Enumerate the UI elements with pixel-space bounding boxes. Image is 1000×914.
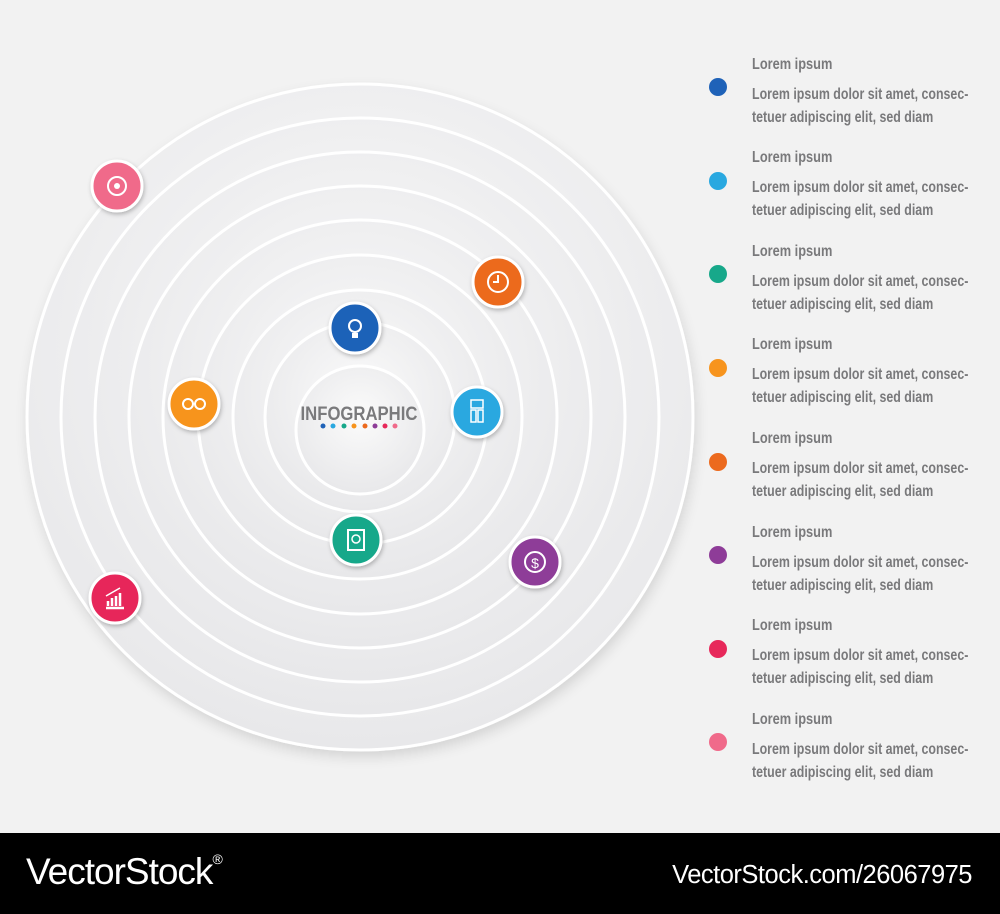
text: Lorem ipsum dolor sit amet, consec- xyxy=(752,86,968,103)
text: Lorem ipsum xyxy=(752,56,832,73)
icon: target (pink) xyxy=(92,161,142,211)
icon: dollar (purple) xyxy=(510,537,560,587)
text: Lorem ipsum dolor sit amet, consec- xyxy=(752,647,968,664)
legend item 6 xyxy=(709,524,968,594)
icon: chart (red) xyxy=(90,573,140,623)
text: tetuer adipiscing elit, sed diam xyxy=(752,670,933,687)
text: Lorem ipsum xyxy=(752,711,832,728)
icon: people (cyan) xyxy=(452,387,502,437)
icon: document (green) xyxy=(331,515,381,565)
footer brand: VectorStock® xyxy=(26,851,222,892)
icon: dollar (purple): $ xyxy=(531,555,539,571)
text: Lorem ipsum xyxy=(752,149,832,166)
center title: INFOGRAPHIC xyxy=(301,403,418,424)
text: Lorem ipsum dolor sit amet, consec- xyxy=(752,179,968,196)
text: Lorem ipsum xyxy=(752,243,832,260)
text: Lorem ipsum xyxy=(752,617,832,634)
text: Lorem ipsum dolor sit amet, consec- xyxy=(752,273,968,290)
text: Lorem ipsum dolor sit amet, consec- xyxy=(752,366,968,383)
text: tetuer adipiscing elit, sed diam xyxy=(752,483,933,500)
text: Lorem ipsum dolor sit amet, consec- xyxy=(752,460,968,477)
text: tetuer adipiscing elit, sed diam xyxy=(752,577,933,594)
text: Lorem ipsum dolor sit amet, consec- xyxy=(752,554,968,571)
legend item 1 xyxy=(709,56,968,126)
legend item 8 xyxy=(709,711,968,781)
text: tetuer adipiscing elit, sed diam xyxy=(752,389,933,406)
icon: clock (orange-red) xyxy=(473,257,523,307)
text: tetuer adipiscing elit, sed diam xyxy=(752,109,933,126)
footer bar xyxy=(0,833,1000,914)
legend item 7 xyxy=(709,617,968,687)
text: tetuer adipiscing elit, sed diam xyxy=(752,202,933,219)
legend item 4 xyxy=(709,336,968,406)
text: tetuer adipiscing elit, sed diam xyxy=(752,296,933,313)
icon: bulb (blue) xyxy=(330,303,380,353)
legend item 5 xyxy=(709,430,968,500)
text: Lorem ipsum xyxy=(752,524,832,541)
icon: gears (orange) xyxy=(169,379,219,429)
footer url: VectorStock.com/26067975 xyxy=(672,861,972,889)
text: Lorem ipsum xyxy=(752,336,832,353)
legend item 3 xyxy=(709,243,968,313)
text: tetuer adipiscing elit, sed diam xyxy=(752,764,933,781)
legend item 2 xyxy=(709,149,968,219)
text: Lorem ipsum xyxy=(752,430,832,447)
text: Lorem ipsum dolor sit amet, consec- xyxy=(752,741,968,758)
